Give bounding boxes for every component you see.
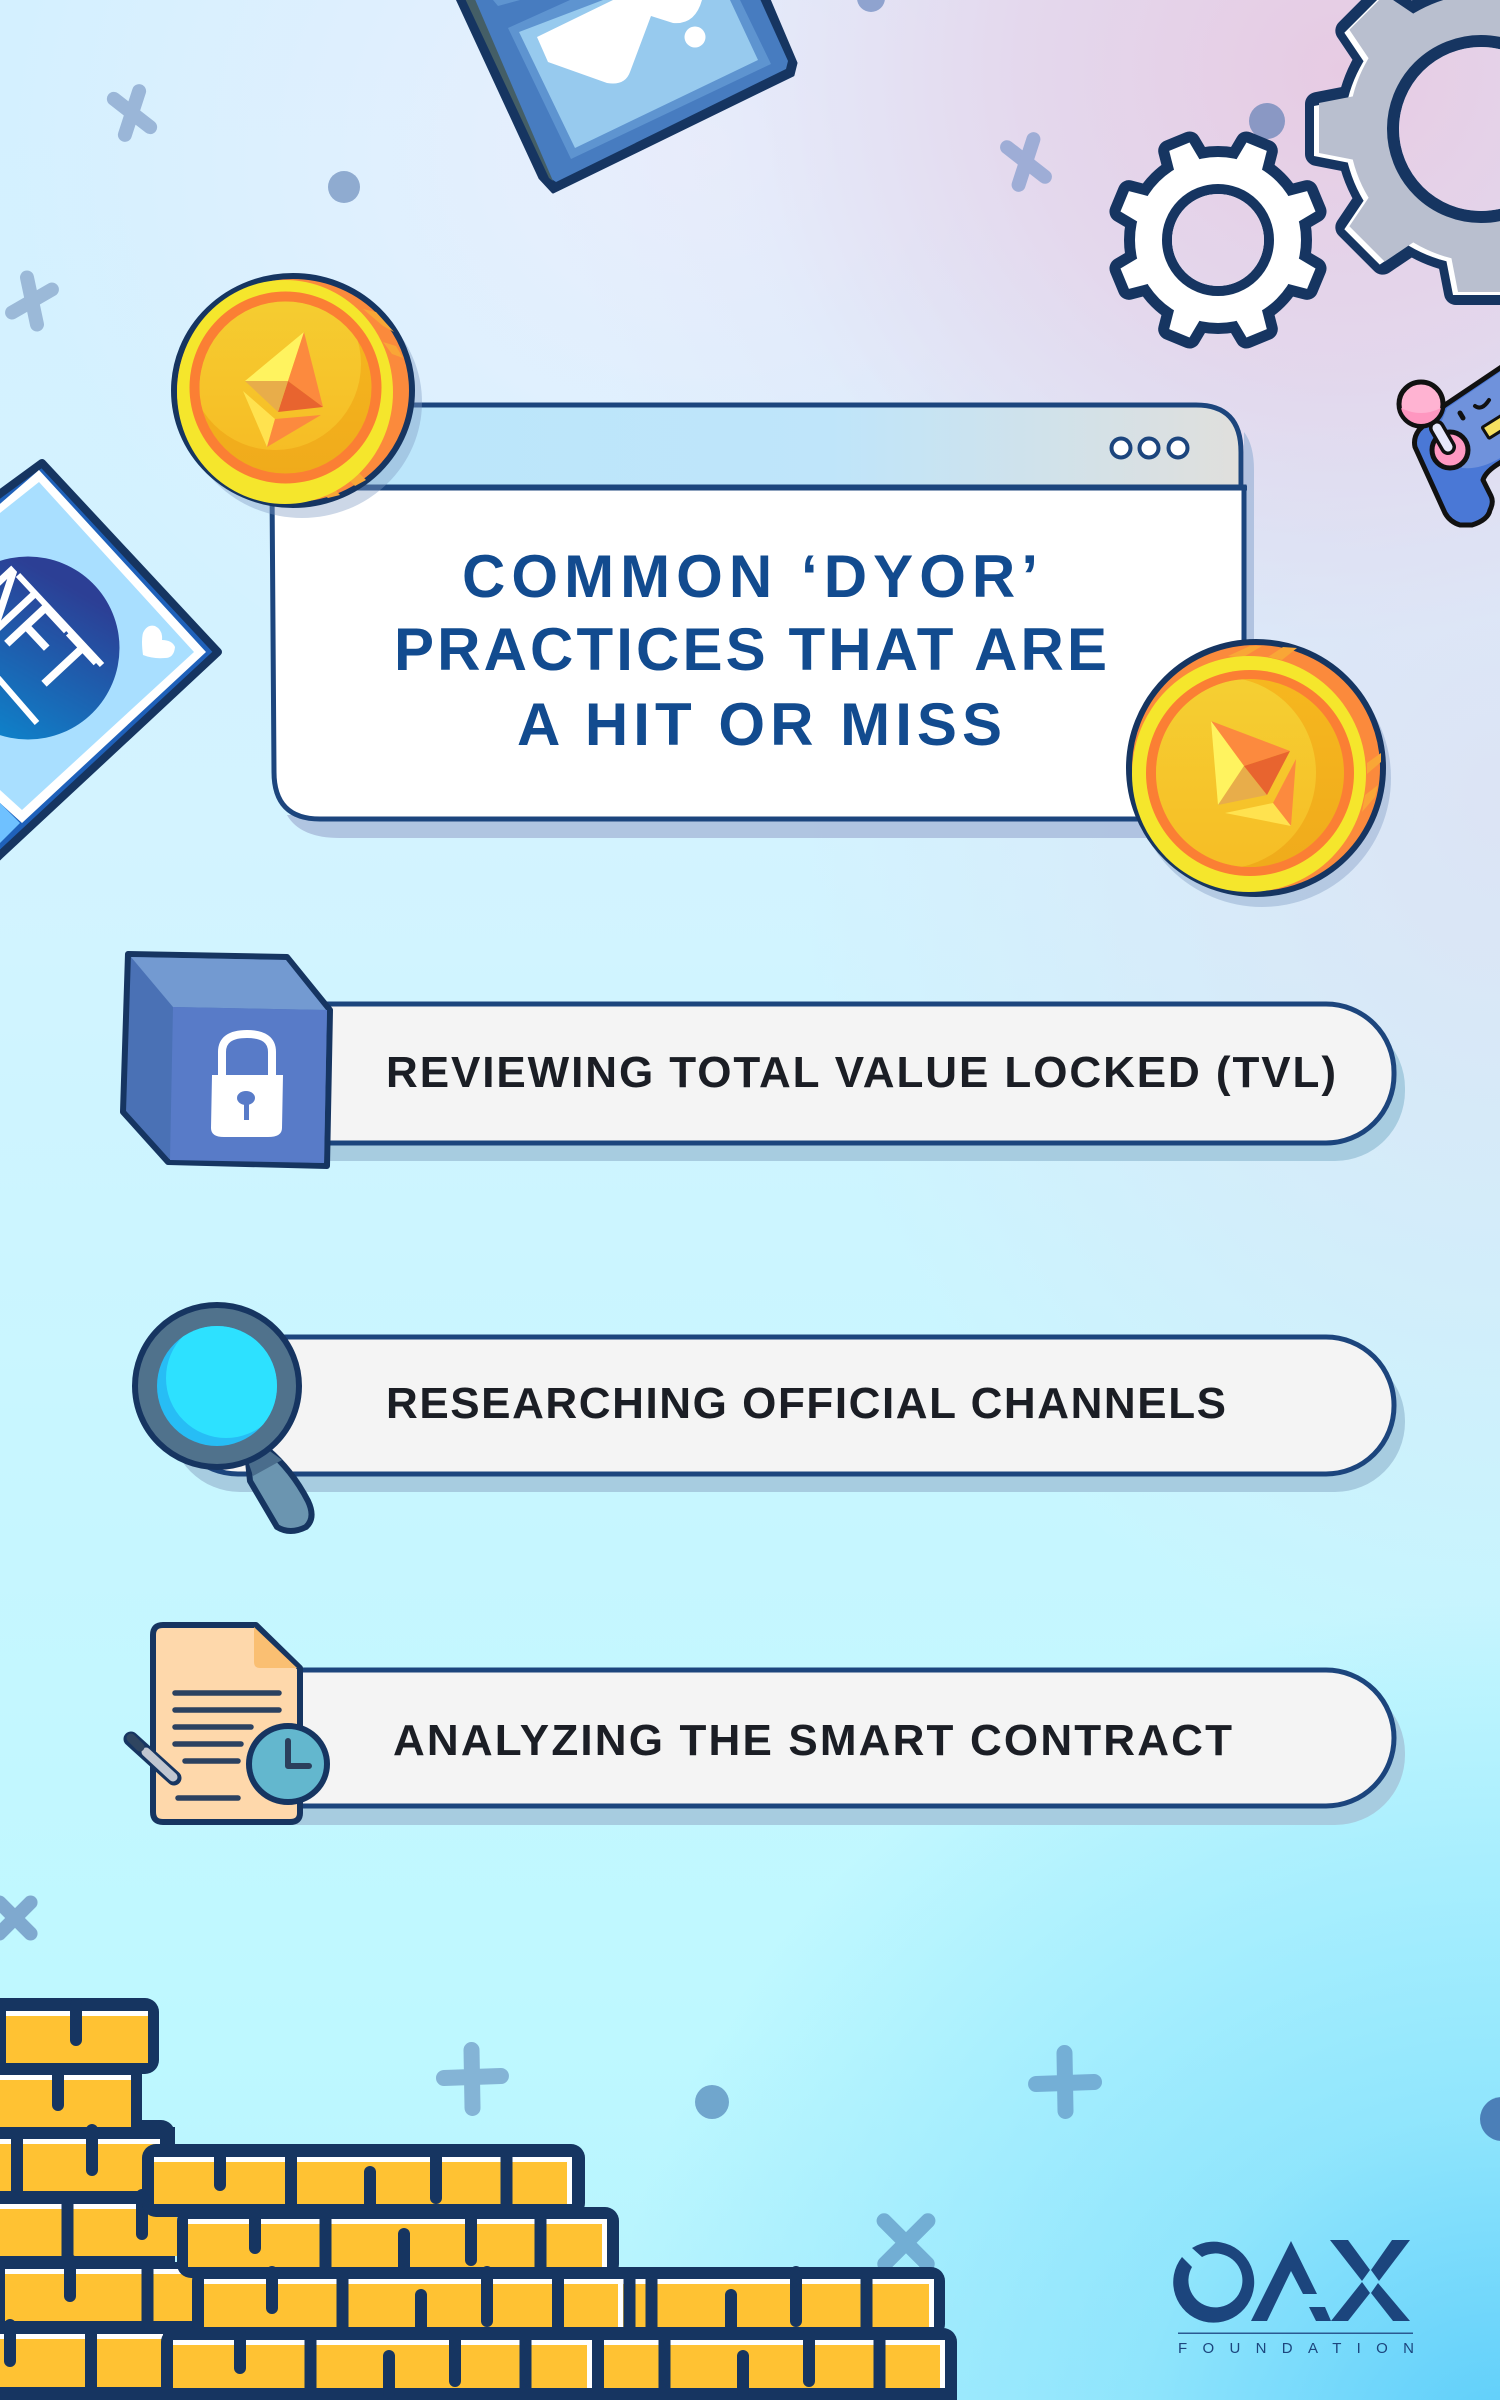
icon: ethereum coin bottom-right [1128, 642, 1391, 907]
icon: picture card top [453, 0, 796, 192]
logo: OAX Foundation: FOUNDATION [1178, 2340, 1414, 2357]
icon: large grey gear [1314, 0, 1500, 295]
pen [131, 1738, 174, 1778]
title text: COMMON ‘DYOR’ [462, 543, 1038, 610]
icon: locked cube [123, 954, 330, 1166]
panel: pill researching official channels [170, 1337, 1405, 1492]
title text [394, 543, 1107, 758]
lock [211, 1034, 283, 1137]
icon: contract document with clock and pen [131, 1625, 327, 1822]
brick row G [142, 2144, 585, 2217]
title text: A HIT OR MISS [517, 691, 1002, 758]
panel: pill analyzing smart contract [200, 1670, 1405, 1825]
brick row H [177, 2207, 619, 2278]
window control dots [1112, 438, 1188, 458]
icon: magnifying glass [135, 1305, 312, 1531]
icon: ethereum coin top-left [174, 276, 422, 518]
title text: PRACTICES THAT ARE [394, 616, 1107, 683]
logo: OAX Foundation [1173, 2240, 1414, 2357]
brick row I [192, 2267, 945, 2338]
panel: pill researching official channels: RESEARCHING OFFICIAL CHANNELS [386, 1379, 1226, 1428]
panel: pill reviewing TVL [230, 1004, 1405, 1161]
ethereum symbol [1211, 721, 1296, 826]
brick row J [161, 2328, 957, 2400]
clock [249, 1726, 327, 1802]
icon: game controller [1399, 366, 1500, 525]
panel: pill analyzing smart contract: ANALYZING THE SMART CONTRACT [393, 1716, 1232, 1765]
gold brick stack [0, 1998, 957, 2400]
ethereum symbol [243, 332, 323, 447]
icon: small white gear [1119, 141, 1317, 339]
panel: title window [272, 405, 1254, 838]
panel: pill reviewing TVL: REVIEWING TOTAL VALUE LOCKED (TVL) [386, 1048, 1336, 1097]
left brick column [0, 1998, 202, 2400]
icon: NFT card [0, 463, 218, 892]
